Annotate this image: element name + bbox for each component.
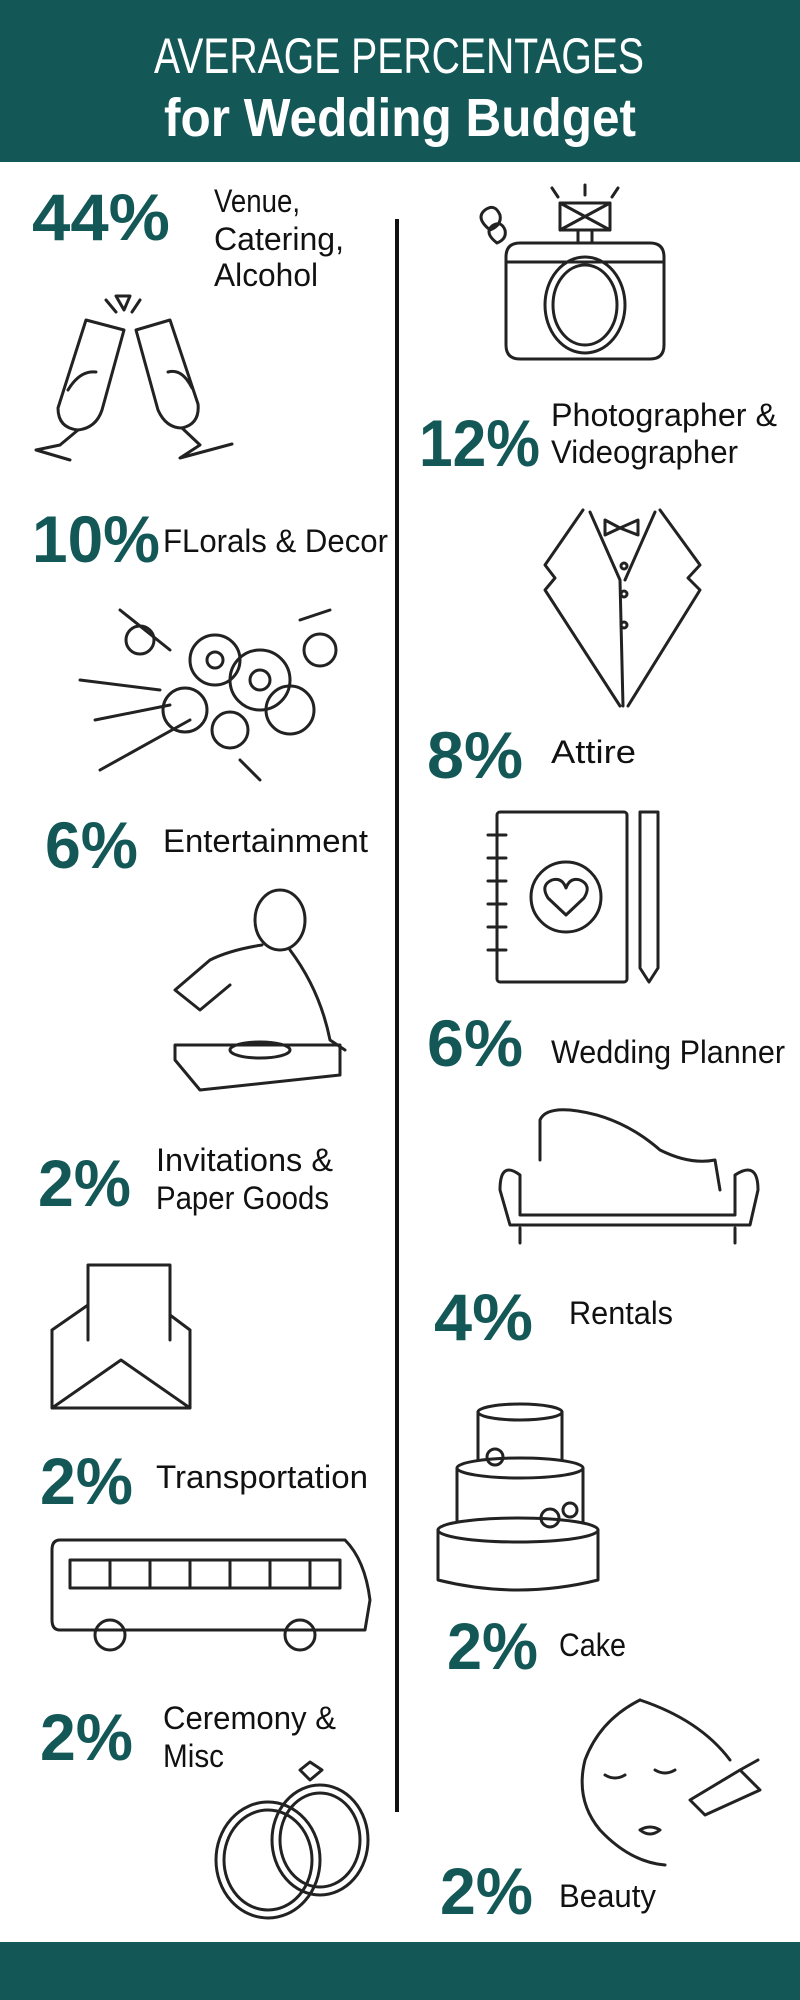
item: 44% venue: Venue, bbox=[214, 183, 300, 219]
icon: camera bbox=[481, 185, 664, 359]
divider bbox=[395, 219, 399, 1812]
item: 44% venue: 44% bbox=[32, 180, 170, 254]
item: 8% attire bbox=[427, 718, 636, 792]
item: 12% photographer: Videographer bbox=[551, 434, 738, 470]
item: 2% beauty bbox=[440, 1854, 656, 1928]
item: 6% wedding planner: 6% bbox=[427, 1006, 523, 1080]
header banner bbox=[0, 0, 800, 162]
item: 6% entertainment: 6% bbox=[45, 808, 138, 882]
item: 10% florals: FLorals & Decor bbox=[163, 523, 388, 559]
item: 8% attire: 8% bbox=[427, 718, 523, 792]
item: 44% venue: Alcohol bbox=[214, 257, 318, 293]
item: 12% photographer bbox=[419, 397, 777, 480]
icon: envelope bbox=[52, 1265, 190, 1408]
item: 4% rentals bbox=[434, 1280, 673, 1354]
item: 12% photographer: Photographer & bbox=[551, 397, 777, 433]
icon: rings bbox=[216, 1762, 368, 1918]
item: 2% ceremony bbox=[40, 1700, 336, 1774]
item: 2% transportation: 2% bbox=[40, 1444, 133, 1518]
item: 12% photographer: 12% bbox=[419, 406, 540, 480]
item: 2% cake: Cake bbox=[559, 1627, 626, 1663]
item: 6% entertainment: Entertainment bbox=[163, 823, 368, 859]
item: 2% ceremony: Ceremony & bbox=[163, 1700, 336, 1736]
icon: planner bbox=[488, 812, 658, 982]
icon: flowers bbox=[80, 610, 336, 780]
item: 2% cake bbox=[447, 1609, 626, 1683]
item: 2% beauty: Beauty bbox=[559, 1878, 656, 1914]
item: 2% transportation bbox=[40, 1444, 368, 1518]
item: 2% invitations: Invitations & bbox=[156, 1142, 333, 1178]
item: 44% venue bbox=[32, 180, 344, 293]
title: AVERAGE PERCENTAGES bbox=[154, 28, 644, 84]
icon: beauty face bbox=[582, 1700, 760, 1865]
item: 4% rentals: Rentals bbox=[569, 1295, 673, 1331]
icon: champagne glasses bbox=[36, 296, 232, 460]
item: 6% wedding planner: Wedding Planner bbox=[551, 1034, 785, 1070]
item: 10% florals: 10% bbox=[32, 502, 160, 576]
item: 4% rentals: 4% bbox=[434, 1280, 533, 1354]
item: 2% invitations: Paper Goods bbox=[156, 1180, 329, 1216]
icon: sofa bbox=[500, 1110, 758, 1243]
item: 2% transportation: Transportation bbox=[156, 1459, 368, 1495]
footer bar bbox=[0, 1942, 800, 2000]
item: 10% florals bbox=[32, 502, 388, 576]
item: 8% attire: Attire bbox=[551, 734, 636, 770]
icon: DJ bbox=[175, 890, 345, 1090]
item: 2% cake: 2% bbox=[447, 1609, 538, 1683]
item: 2% ceremony: 2% bbox=[40, 1700, 133, 1774]
item: 6% entertainment bbox=[45, 808, 368, 882]
item: 2% beauty: 2% bbox=[440, 1854, 533, 1928]
icon: cake bbox=[438, 1404, 598, 1590]
item: 2% invitations bbox=[38, 1142, 333, 1220]
item: 44% venue: Catering, bbox=[214, 221, 344, 257]
item: 6% wedding planner bbox=[427, 1006, 785, 1080]
icon: tuxedo bbox=[545, 510, 700, 706]
title bbox=[154, 28, 644, 148]
item: 2% ceremony: Misc bbox=[163, 1738, 224, 1774]
icon: bus bbox=[52, 1540, 370, 1650]
title: for Wedding Budget bbox=[164, 88, 636, 148]
item: 2% invitations: 2% bbox=[38, 1146, 131, 1220]
